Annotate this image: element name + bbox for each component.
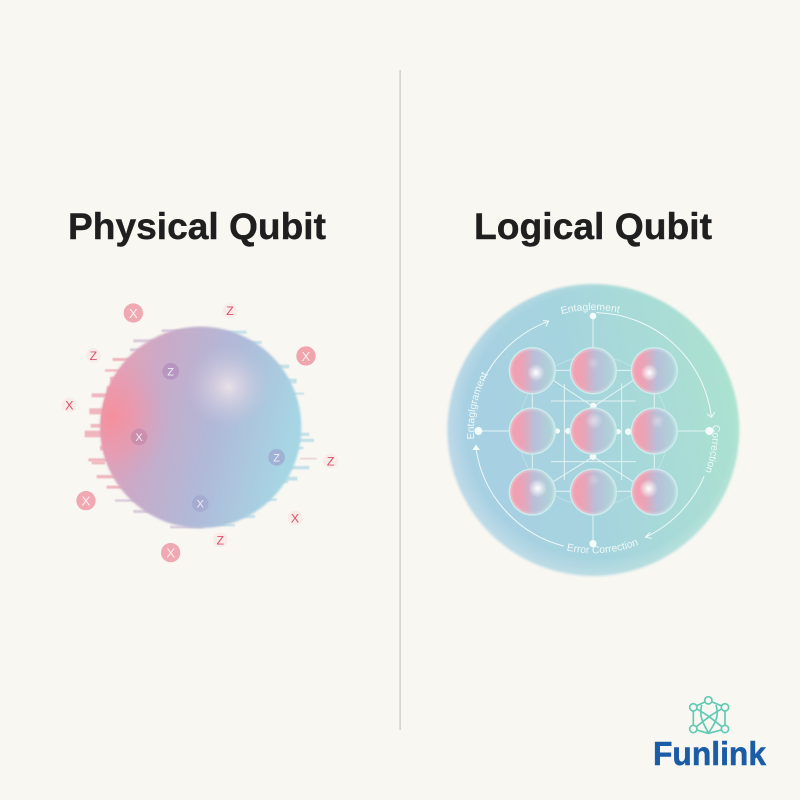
inner error markers: Z [273, 452, 280, 464]
outer filled X markers: X [302, 349, 311, 364]
sphere highlights [527, 357, 665, 498]
arc labels [466, 302, 720, 554]
inner error markers [131, 363, 285, 512]
inner error markers: Z [167, 366, 174, 378]
logo wordmark: Funlink [653, 735, 767, 772]
arc labels: Entaglement [560, 302, 620, 314]
circular flow arrows [476, 313, 715, 546]
outer filled X markers: X [82, 494, 91, 509]
arc labels: Correction [705, 425, 720, 472]
physical qubit illustration [57, 303, 338, 562]
lattice nodes [474, 313, 713, 547]
logical qubit illustration [446, 282, 740, 578]
heading: Physical Qubit: Physical Qubit [68, 206, 326, 247]
outer filled X markers: X [166, 546, 175, 561]
logo network icon [690, 697, 729, 733]
outer small Z and X markers: Z [327, 455, 335, 469]
arrowhead: left [472, 445, 480, 450]
center divider line [400, 70, 401, 730]
arc labels: Entaglgrament [466, 372, 488, 439]
arc labels: Error Correction [567, 540, 638, 554]
heading: Logical Qubit: Logical Qubit [474, 206, 712, 247]
grid of nine qubit spheres [509, 348, 677, 515]
outer small Z and X markers: Z [226, 304, 234, 318]
connector lattice [478, 316, 709, 543]
outer small Z and X markers: Z [90, 349, 98, 363]
glitching sphere [57, 327, 317, 528]
outer small Z and X markers: X [291, 512, 299, 526]
logo: Funlink [653, 697, 767, 772]
outer small Z and X markers [62, 303, 338, 548]
inner error markers: X [135, 432, 143, 444]
outer circle [447, 283, 740, 577]
outer small Z and X markers: X [65, 399, 73, 413]
sphere glass rims [510, 348, 677, 515]
inner error markers: X [197, 499, 205, 511]
outer small Z and X markers: Z [217, 534, 225, 548]
outer filled X markers [76, 303, 316, 562]
outer filled X markers: X [129, 306, 138, 321]
